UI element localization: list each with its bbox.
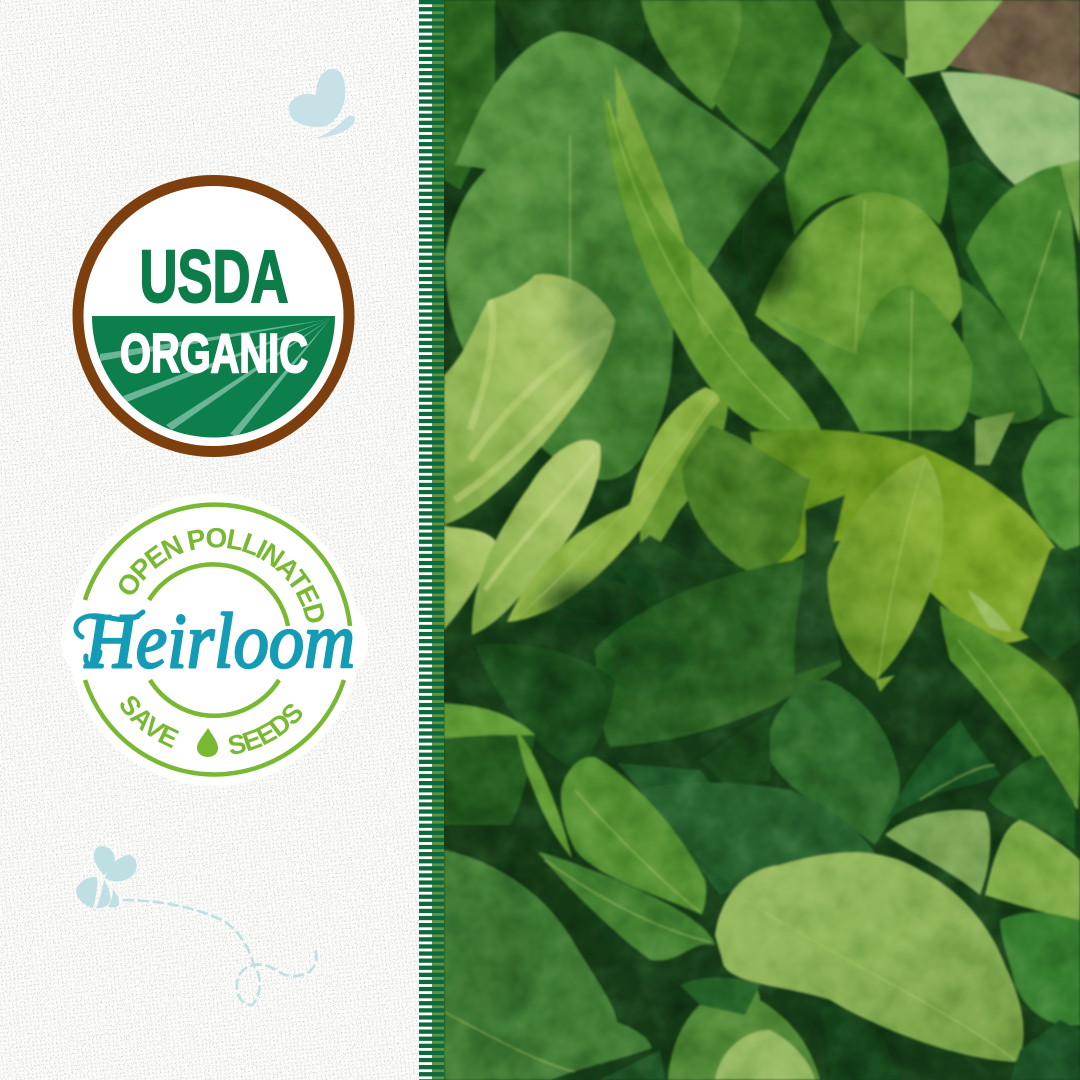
icon: butterfly xyxy=(289,69,355,138)
bottom leaves xyxy=(444,810,1080,1080)
large lit leaf xyxy=(750,429,1069,643)
USDA wordmark: USDA xyxy=(140,235,288,318)
seeds text: SEEDS xyxy=(228,704,302,754)
badge: USDA Organic seal xyxy=(78,180,349,452)
green field segment xyxy=(92,316,335,438)
backdrop leaves xyxy=(444,0,1080,420)
Heirloom script wordmark: Heirloom xyxy=(84,597,355,684)
badge: Heirloom open pollinated xyxy=(62,494,368,786)
warm colour tint over photo xyxy=(444,0,1080,1080)
open pollinated arc text: OPEN POLLINATED xyxy=(119,528,324,622)
ORGANIC wordmark: ORGANIC xyxy=(120,322,308,384)
upper right leaves xyxy=(755,160,1080,465)
stripe border xyxy=(419,0,444,1080)
lower dark leaves xyxy=(475,495,845,770)
veins xyxy=(444,100,1078,1072)
fabric background panel xyxy=(0,0,420,1080)
icon: bee with dashed flight path xyxy=(76,846,316,1005)
soft shading xyxy=(460,180,1060,1020)
icon: seed drop xyxy=(197,728,218,757)
crinkled mid leaves xyxy=(444,274,728,635)
leaf mottling texture xyxy=(444,0,1080,1080)
spear leaf xyxy=(603,65,822,432)
center leaf xyxy=(828,455,944,680)
badge rings xyxy=(85,505,350,774)
save text: SAVE xyxy=(120,696,180,748)
shadowed leaf beside lit leaf xyxy=(682,425,810,574)
photo: spinach leaves xyxy=(432,0,1080,1080)
